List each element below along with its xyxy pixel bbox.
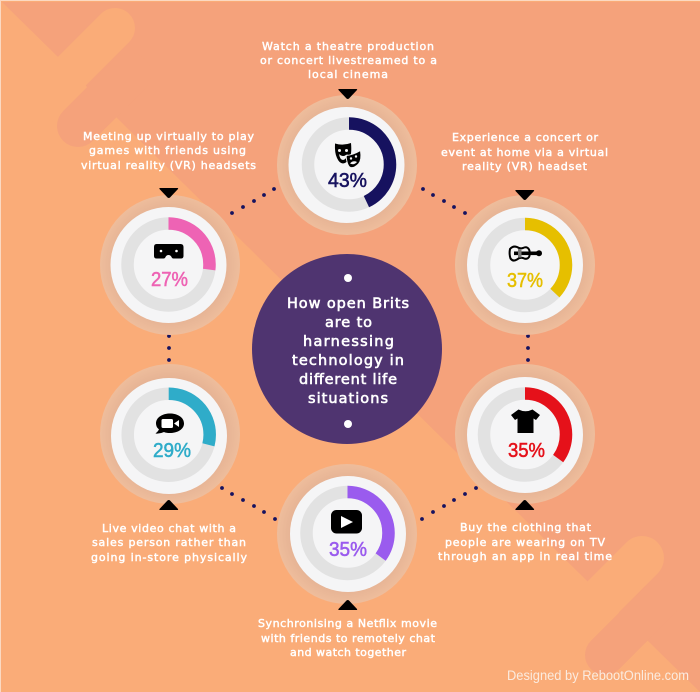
percentage: 37% <box>507 270 543 292</box>
title: technology in <box>292 353 404 369</box>
label: synchronised Netflix: Synchronising a Netflix movie <box>258 617 437 630</box>
label: clothing app <box>438 521 612 563</box>
credit: Designed by RebootOnline.com <box>507 668 689 683</box>
panel: VR games 27% <box>100 195 240 335</box>
icon: video chat bubble <box>156 414 184 434</box>
connector dots <box>167 187 530 521</box>
label: clothing app: through an app in real time <box>438 550 612 563</box>
title: are to <box>325 315 372 331</box>
title <box>287 296 409 407</box>
arrow: down left <box>159 188 178 198</box>
label: video chat: sales person rather than <box>92 536 246 549</box>
arrow: down right <box>515 190 534 200</box>
panel: VR concert 37% <box>455 195 595 335</box>
arrow: up right <box>515 500 534 510</box>
label: clothing app: people are wearing on TV <box>445 536 605 549</box>
label: VR games: virtual reality (VR) headsets <box>81 159 256 172</box>
label: theatre livestream <box>260 40 437 81</box>
label: video chat: going in-store physically <box>91 551 247 564</box>
label: VR games: games with friends using <box>89 144 246 157</box>
label: VR concert: event at home via a virtual <box>441 146 608 159</box>
label: video chat <box>91 522 247 564</box>
icon: VR headset <box>154 244 184 258</box>
title: different life <box>299 372 397 388</box>
panel: theatre livestream 43% <box>277 95 417 235</box>
panel: synchronised Netflix 35% <box>277 464 417 604</box>
title: How open Brits <box>287 296 409 312</box>
percentage: 35% <box>508 440 545 462</box>
label: VR games: Meeting up virtually to play <box>83 130 254 143</box>
label: VR concert: Experience a concert or <box>452 131 598 144</box>
label: synchronised Netflix: with friends to remotely chat <box>261 632 436 645</box>
title: situations <box>308 391 388 407</box>
percentage: 27% <box>151 269 188 291</box>
icon: play button <box>331 510 362 534</box>
label: clothing app: Buy the clothing that <box>460 521 592 534</box>
percentage: 29% <box>153 440 191 462</box>
panel: video chat 29% <box>100 364 240 504</box>
percentage: 35% <box>329 539 367 561</box>
label: VR games <box>81 130 256 172</box>
arrow: down top <box>338 89 357 99</box>
label: synchronised Netflix: and watch together <box>290 646 406 659</box>
label: synchronised Netflix <box>258 617 437 659</box>
icon: guitar <box>510 247 542 261</box>
label: video chat: Live video chat with a <box>102 522 236 535</box>
panel: clothing app 35% <box>455 364 595 504</box>
percentage: 43% <box>328 170 367 192</box>
label: theatre livestream: Watch a theatre production <box>262 40 434 53</box>
arrow: up bottom <box>338 600 357 610</box>
title: harnessing <box>303 334 394 350</box>
central circle with title <box>252 254 442 444</box>
label: VR concert <box>441 131 608 173</box>
icon: t-shirt <box>511 410 540 433</box>
label: theatre livestream: or concert livestreamed to a <box>260 54 437 67</box>
label: VR concert: reality (VR) headset <box>462 160 588 173</box>
arrow: up left <box>159 500 178 510</box>
icon: theatre masks <box>335 143 361 168</box>
label: theatre livestream: local cinema <box>308 68 388 81</box>
